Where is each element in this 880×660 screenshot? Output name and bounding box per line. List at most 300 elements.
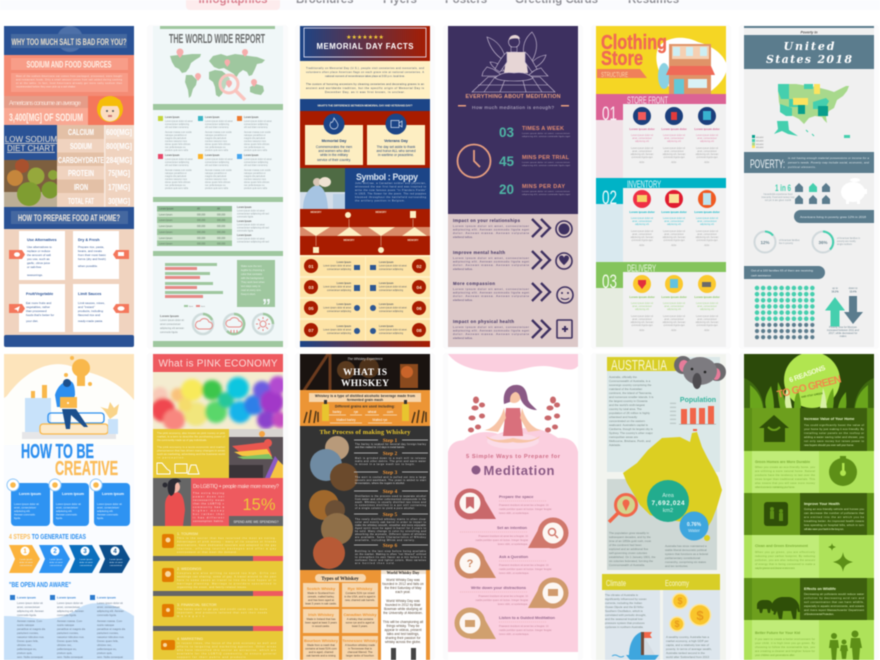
memorial footer <box>300 341 430 347</box>
whiskey process: malts and other debris. The grist and warm water <box>355 460 426 463</box>
donut stats: 36% <box>818 240 828 245</box>
eight numbered steps: Lorem ipsum dolor sit amet <box>379 264 407 268</box>
section: store front: dolor. <box>671 161 677 164</box>
six text blocks: nec pellentesque eu <box>244 146 265 149</box>
step texts: lorem nibh, ut scelerisque. <box>499 571 530 575</box>
step texts: Praesent tincidunt sit amet leo a feugiat. Ut <box>499 563 549 567</box>
six text blocks: Lorem Ipsum <box>244 117 258 119</box>
icon: light bulb <box>64 356 92 386</box>
Australia text panel: seaboard. Australia's capital is <box>609 423 648 427</box>
six text blocks: montes nascetur mus <box>205 140 228 143</box>
frequency stats: 03 <box>499 125 515 140</box>
section: inventory: Lorem ipsum dolor sit <box>663 230 685 233</box>
two day cards: Memorial Day <box>322 139 347 143</box>
six text blocks: pretium quis sem nulla <box>165 149 189 152</box>
step texts: mattis porttitor quam sit luctus. Integer feugiat <box>499 628 552 632</box>
frequency stats <box>499 125 570 197</box>
eight numbered steps: 04 <box>416 285 422 291</box>
table notes: consectetuer adipiscing elit sed <box>237 226 270 230</box>
eight numbered steps <box>300 256 430 341</box>
types of whiskey: contains at least 51% corn <box>305 646 337 650</box>
creative columns: pretium quis, <box>57 651 73 655</box>
creative columns: adipiscing elit. Aenean <box>97 609 124 613</box>
tips: the amount of salt <box>27 253 51 257</box>
eight numbered steps: consectetuer adipiscing <box>379 310 404 313</box>
heading: meditation <box>466 454 561 478</box>
six text blocks: donec quam felis ultrices <box>205 181 231 184</box>
quote panel: ” <box>262 296 271 316</box>
store hero: STRUCTURE <box>601 72 628 79</box>
whiskey process: Malt is grinded down to a malt mill to release <box>355 457 427 460</box>
row texts <box>755 417 865 657</box>
whiskey header: WHAT IS <box>343 368 387 378</box>
creative columns: commodo ligula. <box>57 613 77 617</box>
whiskey process: of a single column to yield a pure alcohol. <box>355 507 415 510</box>
sodium table: CARBOHYDRATE <box>58 155 104 165</box>
yellow sections: available for the LGBTIQ community, to ensure general <box>177 652 276 656</box>
Australia text panel: population of 26 million is highly <box>609 411 650 415</box>
whiskey process: is sometimes distilled in a pot still containing <box>355 504 427 507</box>
six text blocks: Aenean massa cum sociis <box>205 169 233 172</box>
six text blocks: donec quam felis ultrices <box>165 143 191 146</box>
types of whiskey: Canadian Whisky <box>343 612 377 617</box>
creative columns: Aenean massa. Cum <box>97 619 123 623</box>
grey panel text: self-governing crown colonies <box>609 551 648 555</box>
whiskey intro: Malted barley <box>336 418 356 422</box>
yellow intro: The pink economy is a socio-economic and market <box>157 445 225 449</box>
row texts: Better Future for Your Kid <box>755 631 801 635</box>
creative columns: pellentesque eu, <box>97 647 117 651</box>
section: store front: Lorem ipsum dolor sit <box>663 147 685 150</box>
tips: replace or reduce <box>27 249 51 253</box>
poverty definition: is not having enough material possessions or income for a <box>788 156 869 160</box>
six text blocks: donec quam felis ultrices <box>205 143 231 146</box>
four step arrows: consectetuer <box>80 564 93 567</box>
dot matrix <box>754 285 816 340</box>
whiskey process: Step 2 <box>383 451 398 457</box>
water bubble <box>680 512 708 540</box>
infographic card: memorial day <box>300 26 430 347</box>
benefits list: adipiscing elit. Aenean commodo ligula eget <box>453 290 529 294</box>
infographic card: Australia <box>596 354 726 660</box>
donut icons: Lorem ipsum dolor sit <box>160 319 184 322</box>
step texts: Praesent tincidunt sit amet leo a feugiat. Ut <box>499 624 549 628</box>
arrows up and down: males <box>840 335 847 338</box>
row texts: Decreasing air pollutants would reduce water <box>804 592 864 596</box>
yellow intro: market, is a term to describe the purchasing power of <box>157 434 225 438</box>
whiskey process: Step 3 <box>383 470 398 476</box>
three blue cards: ligula. <box>14 516 21 520</box>
icon: clock <box>458 144 490 178</box>
types of whiskey: in the USA, and is aged in <box>344 594 376 598</box>
tips: garlic, citrus juice <box>27 261 50 265</box>
eight numbered steps: Lorem ipsum dolor sit amet <box>323 264 351 268</box>
data table: 000,000 <box>197 226 206 228</box>
whiskey process: mellower flavor and lighter colors. Most varieties <box>355 559 427 562</box>
sodium table: SODIUM <box>70 141 92 151</box>
row texts: also means that you will save more money <box>755 481 816 485</box>
data table: Lorem Ipsum <box>159 237 172 240</box>
green header: 6 REASONS <box>788 365 827 384</box>
section: store front: 01 <box>602 104 617 125</box>
six text blocks: natoque penatibus et <box>165 134 187 137</box>
row texts: your child, it is high time you go green. By <box>755 641 816 645</box>
tips: Dry & Fresh <box>78 238 100 242</box>
poverty title: United <box>784 40 835 53</box>
quote panel: color that contrasts <box>241 273 263 276</box>
six text blocks: magnis dis parturient <box>165 137 187 140</box>
yellow sections: efforts to targeting and marketing agencies. Other areas <box>177 646 277 648</box>
table notes: consectetuer adipiscing elit sed <box>237 212 270 216</box>
icon: coins <box>670 594 710 631</box>
world whisky day: the third Saturday of May <box>385 586 422 590</box>
row texts: soil contamination that can harm wildlife, <box>804 600 864 604</box>
whiskey process: make the whiskey smooth, smoother and more enjoyable <box>355 524 427 527</box>
climate and economy: pressure system that produces <box>605 621 645 625</box>
eight numbered steps: Lorem Ipsum <box>337 262 351 264</box>
memorial intro: ancient and worldwide tradition, but the specific origin of Memorial Day is <box>306 86 425 90</box>
eight numbered steps: Lorem Ipsum <box>379 326 393 328</box>
map legend: 000-000 <box>756 144 764 146</box>
six text blocks: montes nascetur mus <box>244 178 267 181</box>
population chart: 000000 <box>670 415 676 417</box>
heading: prepare food <box>4 207 134 229</box>
report title: THE WORLD WIDE REPORT <box>169 32 265 46</box>
infographic card: go green <box>744 352 874 660</box>
poverty definition: political elements. <box>787 165 816 169</box>
creative hero <box>4 354 134 445</box>
step texts: Prepare the space <box>499 494 534 499</box>
arrows up and down: Poverty rose for Mexican <box>829 326 857 329</box>
one in six: households experience food <box>764 193 793 196</box>
data table: 000,000 <box>197 238 206 240</box>
LGBT question: necessarily mean <box>193 498 224 502</box>
tips: when possible. <box>78 264 98 268</box>
benefits list: adipiscing elit. Aenean commodo ligula eget <box>453 328 529 332</box>
types of whiskey: in wood casks. <box>312 624 330 628</box>
Australia text panel: Sydney. The country's other major <box>609 431 653 435</box>
grey panel text: The population grew steadily in <box>609 531 649 535</box>
creative columns: amet, consectetuer <box>97 605 120 609</box>
icons: bottles and wheat <box>304 400 426 423</box>
row texts: times longer than traditional materials. This <box>755 477 816 481</box>
icon: piggy bank <box>841 178 867 204</box>
LGBT question: Do LGBTIQ + people make more money? <box>193 484 279 490</box>
sodium stat: Americans consume an average <box>9 100 81 107</box>
arrows up and down: increased between 2011 and <box>827 329 860 332</box>
yellow sections: here in some cases at travel to live the kind hopes or in <box>177 579 277 582</box>
poverty title: Poverty In <box>801 30 817 34</box>
row texts: are creating a cleaner and brighter future for <box>755 649 815 653</box>
row texts: not only save money but raises power to <box>804 439 864 443</box>
section: delivery <box>596 262 726 347</box>
step texts: Write down your distractions <box>471 585 527 590</box>
four step arrows: dolor sit amet <box>79 561 93 564</box>
section: delivery: Lorem ipsum dolor sit <box>663 315 685 318</box>
data table: 000,000 <box>217 238 226 240</box>
climate and economy: The climate of Australia is <box>605 593 638 597</box>
sodium table: 17[MG] <box>108 182 130 192</box>
icon: magnifier with pin <box>609 494 636 522</box>
sodium stat: 3,400[MG] OF SODIUM <box>9 112 83 124</box>
tips: Use alternatives to <box>27 245 52 249</box>
row texts: Improve Your Health <box>804 502 840 506</box>
section: inventory: amet, consectetuer <box>632 233 652 236</box>
photo: pride flags <box>229 429 283 478</box>
benefits list <box>453 218 529 340</box>
illustration: books and woman <box>22 379 119 439</box>
map legend: 000-000 <box>756 137 764 139</box>
world whisky day: founded in 2012 and falls on <box>382 582 424 586</box>
Australia text panel: Australia, officially the <box>609 375 637 379</box>
creative columns: adipiscing elit. Aenean <box>17 609 44 613</box>
sodium table: 600[MG] <box>106 127 132 137</box>
six text blocks: pretium quis sem nulla <box>244 149 268 152</box>
eight numbered steps: Lorem Ipsum <box>379 304 393 306</box>
whiskey intro: corn <box>387 410 393 414</box>
benefits list: dolor. Aenean massa. Aenean vulputate <box>453 294 529 298</box>
section: inventory: INVENTORY <box>627 178 661 190</box>
active tab: Infographics <box>186 0 280 10</box>
frequency stats: adipiscing elit, aenean commodo ligula eget <box>522 135 570 138</box>
meditating figure <box>472 32 555 92</box>
section: store front: Lorem ipsum dolor sit <box>631 147 653 150</box>
eight numbered steps: Lorem Ipsum <box>379 283 393 285</box>
whiskey process: Step 1 <box>383 438 398 444</box>
yellow sections: 1. TOURISM <box>177 532 198 536</box>
tips: you use, such as <box>27 257 50 261</box>
meditation heading: EVERYTHING ABOUT MEDITATION <box>466 94 561 100</box>
arrows up and down: 2017, while decreased for <box>829 332 857 335</box>
three blue cards: Lorem ipsum <box>19 492 41 496</box>
infographic card: world wide report <box>153 26 283 347</box>
quote panel: They work best when <box>241 281 265 284</box>
bar chart: Item <box>201 305 205 308</box>
six reason rows <box>744 408 874 660</box>
frequency stats: Lorem ipsum dolor sit amet, consectetuer <box>522 132 570 135</box>
icons: houses <box>795 183 830 204</box>
whiskey intro: wheat <box>368 410 376 414</box>
donut stats: of American families <box>779 239 800 242</box>
section: store front: amet, consectetuer <box>697 150 717 153</box>
benefits list: dolor. Aenean massa. Aenean vulputate <box>453 332 529 336</box>
steps heading: 4 STEPS TO GENERATE IDEAS <box>9 532 86 541</box>
yellow sections: Couples are also willing to spend too high. Gifts can <box>177 572 277 575</box>
climate and economy: A wealthy country, Australia has a <box>666 635 709 639</box>
six text blocks: elit sed diam nonummy <box>165 126 189 129</box>
six text blocks: Lorem ipsum dolor sit amet <box>205 158 233 161</box>
types of whiskey: and has been aged at <box>308 598 334 602</box>
green header <box>744 352 874 408</box>
area bubble <box>647 480 689 522</box>
types of whiskey: Made from a mash that <box>307 643 335 647</box>
tips: Fruit/Vegetable <box>26 292 53 296</box>
Australia text panel: Commonwealth of Australia, is a <box>609 379 651 383</box>
section: delivery: adipiscing elit. Aenean <box>696 321 719 324</box>
six text blocks: nec pellentesque eu <box>165 146 186 149</box>
section: store front: Lorem ipsum dolor sit <box>696 134 718 137</box>
step texts: Praesent tincidunt sit amet leo a feugiat. Ut <box>479 534 528 538</box>
tips: beans, and meats <box>78 249 102 253</box>
climate and economy: capita, and a relatively low rate of <box>666 643 709 647</box>
poverty growth pill <box>794 210 880 223</box>
creative columns: parturient montes, <box>57 631 79 635</box>
types of whiskey: Bourbon Whiskey <box>304 638 339 643</box>
four step arrows: Lorem ipsum <box>110 558 122 561</box>
arrows up and down: 16.2% <box>831 290 839 294</box>
six text blocks: pretium quis sem nulla <box>165 187 189 190</box>
four step arrows: dolor sit amet <box>19 561 33 564</box>
climate and economy: currents, including the Indian <box>605 601 642 605</box>
quote panel: Make sure the text <box>241 265 262 268</box>
tips: foods that's better for <box>26 313 54 317</box>
types of whiskey: Made in Scotland from <box>308 591 335 595</box>
tips: flavored rice and <box>78 313 101 317</box>
section: delivery: adipiscing elit. Aenean <box>663 321 686 324</box>
six text blocks: nec pellentesque eu <box>205 184 226 187</box>
section: inventory: Lorem ipsum dolor sit <box>631 230 653 233</box>
world whisky day: the University of Aberdeen. <box>383 611 423 615</box>
families pill <box>734 266 825 279</box>
creative columns: amet, consectetuer <box>17 605 40 609</box>
climate and economy: cyclones in northern Australia. <box>605 625 644 629</box>
data table: Lorem Ipsum <box>159 208 173 210</box>
climate and economy: $ <box>674 619 680 629</box>
types of whiskey: A whisky that contains <box>347 617 374 621</box>
row texts: Going an eco-friendly vehicle and homes you <box>804 507 864 511</box>
four step arrows: Lorem ipsum <box>50 558 62 561</box>
world whisky day: World Whisky Day <box>387 570 419 575</box>
row texts: are utilizing a more natural home. Natural <box>755 469 815 473</box>
creative columns: adipiscing elit. Aenean <box>57 609 84 613</box>
creative columns: pellentesque eu, <box>17 647 37 651</box>
three blue cards: ligula. <box>97 516 104 520</box>
LGBT question: that the LGBTIQ + <box>193 502 224 506</box>
symbol panel <box>345 168 430 209</box>
section: delivery: amet, consectetuer <box>664 305 684 308</box>
types of whiskey: Tennessee Whisky <box>342 638 379 643</box>
frequency stats: TIMES A WEEK <box>522 126 564 132</box>
heading: meditation: 5 Simple Ways to Prepare for <box>466 454 561 460</box>
section: store front: adipiscing elit. Aenean <box>696 153 719 156</box>
three blue cards: Lorem ipsum <box>62 492 84 496</box>
yellow intro: such as marketing, advertising and the business world <box>157 452 225 456</box>
quote panel: with the background. <box>241 277 264 280</box>
infographic card: meditation frequency <box>448 26 578 347</box>
Australia text panel: metropolitan areas are <box>609 435 638 439</box>
yellow intro: phenomenon that has driven many changes in areas <box>157 448 226 452</box>
creative columns: sociis natoque <box>17 623 35 627</box>
whiskey process: The barley is soaked for several day forsign barley <box>355 443 427 446</box>
icon: sailing boat <box>612 632 659 660</box>
sodium table: 284[MG] <box>106 155 132 165</box>
benefits list: Lorem ipsum dolor sit amet, consectetuer <box>453 224 529 228</box>
row icons <box>757 415 800 619</box>
symbol panel: John McCrae, a Canadian soldier and physician, <box>355 182 426 185</box>
climate and economy: $ <box>696 608 704 623</box>
section: store front: Lorem ipsum dolor sit <box>663 134 685 137</box>
infographic card: pink economy <box>151 354 288 660</box>
data table: 000,000 <box>217 214 226 216</box>
climate and economy <box>602 574 720 660</box>
step texts: Listen to a Guided Meditation <box>499 615 556 620</box>
section: store front <box>596 94 726 178</box>
six text blocks: montes nascetur mus <box>205 178 228 181</box>
table notes: consectetuer adipiscing elit sed <box>237 240 270 244</box>
water bubble: Water <box>688 528 700 533</box>
six text blocks: magnis dis parturient <box>244 175 266 178</box>
six text blocks: donec quam felis ultrices <box>244 181 270 184</box>
eight numbered steps: Lorem ipsum dolor sit amet <box>323 306 351 310</box>
yellow sections: 2. WEDDINGS <box>177 567 202 571</box>
row texts: adding a water saving toilet and shower, you <box>804 435 864 439</box>
table notes: commodo ligula <box>237 216 254 218</box>
LGBT question: 15% <box>242 496 276 514</box>
section: inventory <box>596 178 726 262</box>
three blue cards: Aenean commodo <box>97 512 119 516</box>
Australia text panel <box>607 357 720 472</box>
four step arrows: Lorem ipsum <box>80 558 92 561</box>
one in six: insecurity. Food and money may <box>761 196 795 199</box>
creative columns: pretium quis, <box>17 651 33 655</box>
frequency stats: adipiscing elit, aenean commodo ligula eget <box>522 164 570 167</box>
Australia text panel: and numerous smaller islands. It is <box>609 395 654 399</box>
eight numbered steps: consectetuer adipiscing <box>327 268 352 271</box>
sodium section: or at the table. In fact, food Americans already get more salty sodium than <box>16 82 123 85</box>
section: inventory: amet, consectetuer <box>664 220 684 223</box>
row texts: Green Homes are More Durable <box>755 460 810 464</box>
three blue cards: ligula. <box>56 516 63 520</box>
Australia title: AUSTRALIA <box>611 358 667 374</box>
whiskey intro: Different grains are used including: <box>335 404 395 408</box>
section: store front: adipiscing elit. Aenean <box>663 153 686 156</box>
eight numbered steps: 07 <box>308 328 314 334</box>
navigation bar <box>0 0 880 10</box>
four step arrows <box>9 545 130 573</box>
symbol panel: Symbol : Poppy <box>356 172 418 182</box>
creative columns: commodo ligula. <box>17 613 37 617</box>
section: store front: amet, consectetuer <box>697 137 717 140</box>
types of whiskey: in Tennessee that is <box>348 646 373 650</box>
two day cards: Veterans Day <box>384 139 409 143</box>
data table: Lorem Ipsum <box>159 231 172 234</box>
heading: meditation: Meditation <box>484 463 555 478</box>
donut stats: of American families in <box>837 237 861 240</box>
table notes: Lorem ipsum dolor sit amet <box>237 210 265 212</box>
section: store front: adipiscing elit <box>667 140 681 143</box>
section: delivery: Lorem ipsum dolor sit <box>696 315 718 318</box>
six text blocks: Lorem ipsum dolor sit amet <box>165 120 193 123</box>
eight numbered steps: consectetuer adipiscing <box>327 310 352 313</box>
grey panel text: subsequent decades, and by the <box>609 535 651 539</box>
six text blocks: nec pellentesque eu <box>244 184 265 187</box>
photo: veterans <box>300 168 345 209</box>
step texts: lorem nibh, ut scelerisque. <box>499 511 530 515</box>
tab labels <box>296 0 679 6</box>
world whisky day: World Whisky Day was <box>386 578 420 582</box>
whiskey process: color and mostly oak barrel in order to impart to <box>355 521 427 524</box>
section: inventory: dolor. <box>671 244 677 247</box>
climate and economy: and the seasonal tropical low- <box>605 617 643 621</box>
LGBT question: power does not <box>193 494 224 498</box>
grey panel text: time of an 1850s gold rush, most <box>609 539 651 543</box>
timeline: MEMORY <box>375 211 387 214</box>
population chart: 000000 <box>670 411 676 413</box>
section: store front: amet, consectetuer <box>664 150 684 153</box>
photo: apples <box>4 159 58 207</box>
quote panel: text stays easy to <box>241 285 261 288</box>
creative columns: Donec quam felis, <box>57 639 79 643</box>
